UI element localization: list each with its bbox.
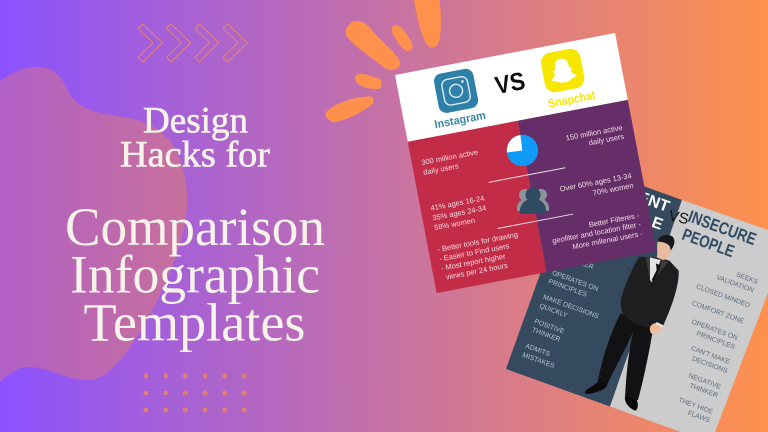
insecure traits list: DECISIONS [691, 356, 729, 375]
vs label: VS [667, 207, 690, 228]
instagram stats text: views per 24 hours [445, 261, 509, 281]
snapchat stats text: Over 60% ages 13-34 [559, 171, 632, 194]
title: design hacks for: Hacks for [120, 134, 270, 176]
snapchat stats text: Better Filteres - [588, 211, 640, 229]
instagram stats text: daily users [422, 161, 460, 177]
white header band [395, 33, 628, 142]
instagram stats text: 300 million active [421, 147, 479, 167]
confident traits list: MISTAKES [521, 352, 556, 370]
insecure traits list: THINKER [688, 383, 719, 399]
insecure traits list: PRINCIPLES [695, 330, 736, 351]
insecure traits list: NEGATIVE [687, 373, 722, 391]
navy confident side [506, 163, 682, 406]
divider line two [498, 214, 573, 228]
snapchat stats text: daily users [588, 132, 625, 147]
divider line one [489, 168, 565, 182]
snapchat stats text [533, 123, 644, 255]
heading: insecure people: PEOPLE [680, 225, 737, 261]
title: comparison infographic templates [65, 197, 325, 353]
insecure traits list: SEEKS [735, 272, 759, 286]
confident traits list: OPERATES ON [551, 270, 599, 293]
snapchat stats text: 70% women [592, 181, 634, 197]
snapchat stats text: 150 million active [565, 123, 623, 143]
insecure traits list: CLOSED MINDED [695, 283, 751, 309]
red instagram column [408, 121, 547, 293]
snapchat stats text: More millenial users - [572, 229, 644, 251]
confident traits list: PRINCIPLES [547, 278, 588, 299]
instagram stats text: 58% women [433, 216, 476, 232]
grey insecure side [610, 200, 768, 432]
title: design hacks for [120, 100, 270, 176]
icon: snapchat [539, 47, 586, 94]
confident traits list: ADMITS [524, 343, 551, 358]
instagram stats text: - Better tools for drawing [437, 230, 519, 254]
heading: confident people: CONFIDENT [578, 168, 672, 216]
instagram label: Instagram [434, 110, 487, 131]
icon: instagram [433, 67, 479, 114]
snapchat label: Snapchat [547, 88, 597, 111]
confident traits list: MAKE DECISIONS [542, 294, 600, 321]
decorative blob [0, 67, 187, 382]
instagram stats text: 35% ages 24-34 [432, 203, 487, 222]
insecure traits list [677, 272, 759, 425]
icon: users [517, 187, 549, 214]
purple snapchat column [518, 100, 657, 272]
dot grid [144, 374, 247, 412]
confident traits list: QUICKLY [538, 303, 569, 320]
confident traits list: THINKER [531, 327, 561, 344]
insecure traits list: OPERATES ON [690, 319, 738, 342]
chevron arrows [138, 24, 247, 62]
snapchat stats text: geofilter and location filter - [551, 220, 642, 245]
title: design hacks for: Design [143, 100, 248, 142]
insecure traits list: FLAWS [687, 410, 711, 425]
instagram stats text: - Easier to Find users [438, 241, 510, 263]
panel: confident vs insecure infographic [506, 163, 768, 432]
confident traits list: THINKER [564, 254, 594, 271]
confident traits list: POSITIVE [533, 318, 566, 336]
title: comparison infographic templates: Comparison [65, 197, 325, 257]
title: comparison infographic templates: Infographic [70, 245, 320, 305]
instagram stats text: 41% ages 16-24 [430, 194, 485, 213]
insecure traits list: VALIDATION [715, 274, 755, 294]
instagram stats text: - Most report higher [440, 252, 507, 273]
orange burst shapes [326, 0, 441, 122]
businessman illustration [585, 235, 679, 411]
insecure traits list: COMFORT ZONE [691, 300, 745, 326]
pie chart icon [507, 135, 538, 166]
insecure traits list: CAN'T MAKE [690, 345, 731, 366]
instagram stats text [420, 143, 524, 282]
confident traits list [521, 254, 600, 370]
insecure traits list: THEY HIDE [677, 397, 714, 416]
title: comparison infographic templates: Templates [84, 293, 306, 353]
vs label: VS [493, 67, 528, 100]
panel: instagram vs snapchat infographic [395, 33, 657, 293]
heading: confident people: PEOPLE [598, 196, 665, 234]
